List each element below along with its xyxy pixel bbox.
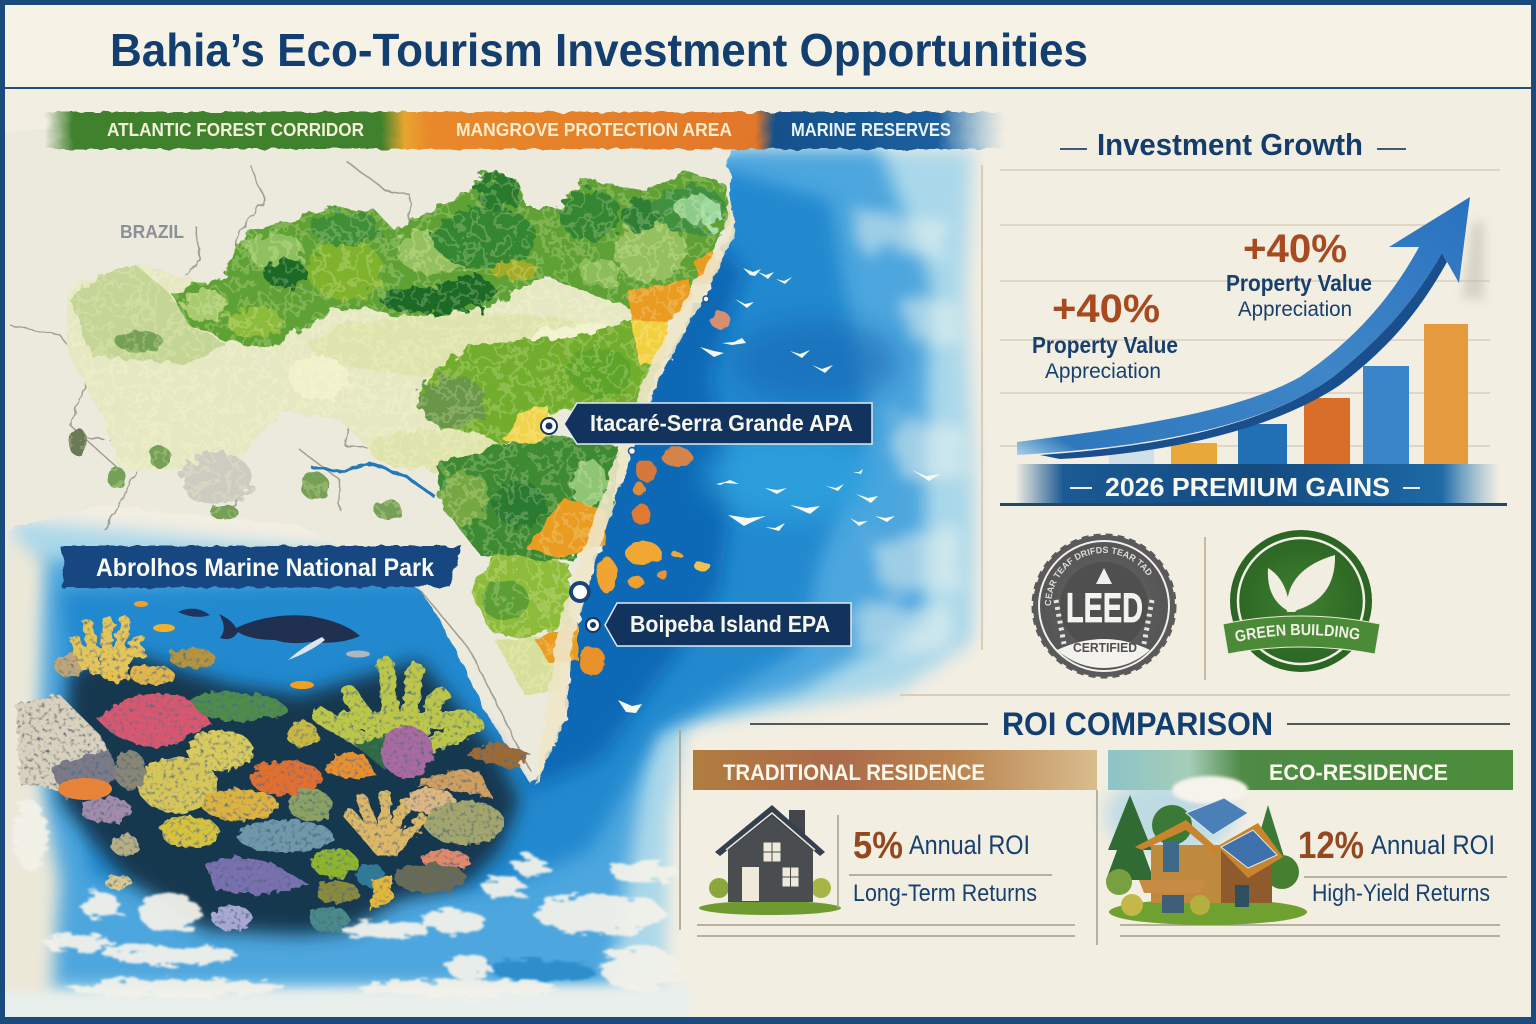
banner: 2026 premium gains bbox=[1000, 464, 1507, 506]
yellow bumpy coral bbox=[187, 730, 253, 770]
stat: 12% annual ROI bbox=[1298, 825, 1495, 867]
ribbon bbox=[1223, 616, 1380, 654]
yellow flat coral bbox=[202, 789, 278, 821]
deep sea patch bbox=[488, 959, 592, 981]
rust coral bbox=[466, 740, 532, 770]
legend: Atlantic Forest: ATLANTIC FOREST CORRIDOR bbox=[107, 120, 364, 140]
coastal strip bbox=[535, 200, 735, 785]
callout: +40% left: Appreciation bbox=[1045, 360, 1161, 383]
grey region bbox=[181, 453, 253, 507]
coral pink lower bbox=[422, 850, 470, 870]
west green dabs bbox=[69, 331, 402, 520]
stat: 5% annual ROI bbox=[853, 825, 1030, 867]
central green bbox=[416, 320, 664, 445]
legend: Marine Reserves: MARINE RESERVES bbox=[791, 120, 951, 140]
callout: +40% right: Property Value bbox=[1226, 270, 1372, 296]
tan branching coral bbox=[350, 795, 422, 850]
heading: Investment Growth bbox=[1097, 127, 1363, 162]
river bbox=[311, 463, 435, 497]
purple coral lower bbox=[205, 855, 310, 895]
badge: LEED certified: CERTIFIED bbox=[1073, 640, 1137, 655]
big olive coral bbox=[320, 665, 475, 750]
sea bbox=[12, 150, 975, 1002]
banner: 2026 premium gains: 2026 PREMIUM GAINS bbox=[1105, 472, 1390, 502]
callout: Itacaré-Serra Grande APA bbox=[541, 403, 872, 444]
pink coral bbox=[98, 694, 212, 748]
legend ribbon bbox=[45, 112, 1005, 149]
coral reef illustration bbox=[0, 530, 690, 1024]
left shore haze bbox=[0, 530, 60, 1020]
paper panel behind right column bbox=[672, 100, 1536, 1024]
badge: LEED certified: CEAR TEAF DRIFDS TEAR TAD bbox=[1044, 546, 1152, 606]
whale bbox=[219, 614, 360, 660]
bottom pale band bbox=[0, 985, 690, 1024]
badge: green building: GREEN BUILDING bbox=[1235, 624, 1360, 642]
southern forest bbox=[435, 430, 622, 565]
bar chart bbox=[1109, 324, 1468, 464]
forest patches bbox=[183, 174, 726, 337]
green coral lower bbox=[312, 848, 358, 878]
southern green bbox=[470, 552, 570, 640]
stat: 5% annual ROI: Annual ROI bbox=[909, 830, 1030, 860]
tan shells bbox=[415, 770, 492, 798]
region borders bbox=[10, 160, 530, 770]
map: Bahia coast bbox=[0, 130, 975, 1002]
stat: 12% annual ROI: Annual ROI bbox=[1371, 830, 1495, 860]
callout: Abrolhos Marine National Park: Abrolhos Marine National Park bbox=[96, 554, 434, 582]
card: eco-residence bbox=[1105, 750, 1513, 925]
legend: Mangrove: MANGROVE PROTECTION AREA bbox=[456, 120, 732, 140]
divider between badges bbox=[1204, 537, 1206, 680]
land base bbox=[0, 130, 733, 785]
panel: ROI comparison bbox=[680, 706, 1513, 945]
yellow round coral bbox=[161, 816, 219, 848]
callout: Boipeba Island EPA: Boipeba Island EPA bbox=[630, 611, 830, 637]
callout: +40% left bbox=[1032, 287, 1178, 383]
header bbox=[1105, 750, 1513, 855]
white water clouds bbox=[14, 800, 680, 997]
panel: investment growth bbox=[900, 127, 1510, 695]
mapped land regions bbox=[67, 170, 731, 695]
icon: eco house with solar panels bbox=[1106, 776, 1307, 925]
title: Bahia’s Eco-Tourism Investment Opportunities bbox=[110, 24, 1088, 76]
badge: LEED certified: LEED bbox=[1066, 584, 1143, 631]
callout: Abrolhos Marine National Park bbox=[60, 546, 462, 588]
forest corridor base bbox=[171, 170, 731, 350]
callout: +40% left: Property Value bbox=[1032, 332, 1178, 358]
pale interior bbox=[67, 263, 650, 470]
stat: 12% annual ROI: 12% bbox=[1298, 825, 1364, 867]
pale central region bbox=[370, 430, 500, 470]
yellow branching coral bbox=[75, 622, 140, 672]
offshore patches bbox=[579, 311, 730, 676]
stat: 5% annual ROI: 5% bbox=[853, 825, 903, 867]
orange shell bbox=[58, 778, 112, 800]
icon: house bbox=[699, 805, 841, 915]
small fish bbox=[134, 601, 370, 689]
icon: leaf bbox=[1268, 555, 1335, 612]
birds bbox=[618, 268, 940, 713]
callout: Boipeba Island EPA bbox=[571, 583, 851, 646]
callout: +40% right: Appreciation bbox=[1238, 298, 1352, 321]
orange coral bbox=[250, 760, 322, 796]
caption: long-term returns: Long-Term Returns bbox=[853, 880, 1037, 907]
pale coral left bbox=[15, 695, 115, 790]
heading: ROI COMPARISON bbox=[1002, 706, 1273, 742]
header bbox=[693, 750, 1097, 790]
yellow zone bbox=[503, 405, 552, 445]
light north-west region bbox=[70, 263, 224, 365]
country label: BRAZIL bbox=[120, 222, 184, 242]
title bar bbox=[0, 0, 1536, 89]
reef shadow bbox=[60, 650, 520, 935]
header: ECO-RESIDENCE bbox=[1269, 760, 1448, 785]
blue grey coral bbox=[237, 820, 333, 852]
growth arrow bbox=[1017, 197, 1470, 459]
purple coral bbox=[381, 726, 433, 778]
callout: +40% right: +40% bbox=[1243, 227, 1347, 271]
pale sea patches bbox=[850, 210, 965, 650]
mauve coral bbox=[80, 797, 132, 823]
arrow shadow bbox=[1462, 222, 1484, 300]
card: traditional residence bbox=[693, 750, 1097, 915]
pale band bbox=[310, 313, 630, 377]
callout: Itacaré-Serra Grande APA: Itacaré-Serra Grande APA bbox=[590, 410, 853, 436]
badge: LEED certified bbox=[1032, 534, 1176, 678]
callout: +40% right bbox=[1226, 227, 1372, 321]
callout: +40% left: +40% bbox=[1052, 287, 1160, 331]
header: TRADITIONAL RESIDENCE bbox=[723, 760, 985, 785]
coast markers bbox=[628, 296, 709, 454]
mangrove orange bbox=[525, 250, 718, 662]
green coral bbox=[190, 691, 290, 721]
caption: high-yield returns: High-Yield Returns bbox=[1312, 880, 1490, 907]
badge: green building bbox=[1223, 530, 1380, 672]
